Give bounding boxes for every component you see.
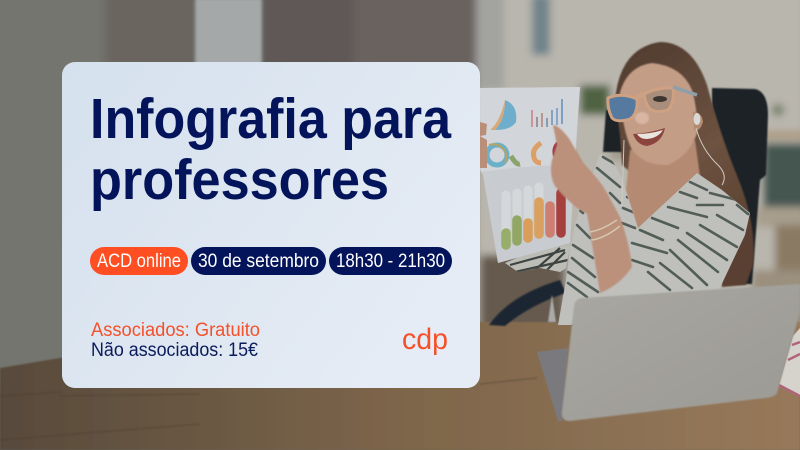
pill: ACD online: ACD online [97,251,181,272]
fingers holding document [551,125,595,213]
table [0,322,800,450]
pill: time [329,247,452,275]
bracelets [590,220,620,240]
earphone and cable [622,113,724,205]
chair [489,88,768,326]
laptop [537,284,800,421]
pricing: Não associados: 15€ [91,340,258,361]
notebook [779,328,800,396]
laptop base [537,348,568,421]
pill: date: 30 de setembro [198,251,319,272]
red arc [554,143,558,156]
shirt torso with stripes [558,154,750,325]
ear [693,112,703,130]
logo: cdp: cdp [402,323,448,356]
background: white brick column [195,0,262,68]
fingers behind document [480,122,487,168]
pill: ACD online [90,247,188,275]
title: Infografia para [90,87,452,151]
title: professores [90,148,389,212]
panel: event card [62,62,480,388]
pill: time: 18h30 - 21h30 [336,251,445,272]
neck and chest [626,140,700,230]
bars: values [506,193,561,245]
title [90,87,452,212]
document with charts [480,87,595,263]
orange arc [533,143,541,163]
smile [633,128,665,146]
arm and hand [551,125,632,293]
face [620,63,697,165]
donut chart [487,145,507,165]
pricing: Associados: Gratuito [91,320,260,341]
hair back [615,42,754,287]
pricing [91,320,260,361]
glasses [608,87,697,121]
sleeve behind document [505,245,570,272]
pie chart [495,100,516,130]
small column chart [532,99,562,127]
laptop lid [562,284,800,421]
small green arc [511,156,520,164]
nose [635,112,649,124]
pill: date [191,247,326,275]
woman [500,42,760,330]
bars: tracks [506,187,539,245]
